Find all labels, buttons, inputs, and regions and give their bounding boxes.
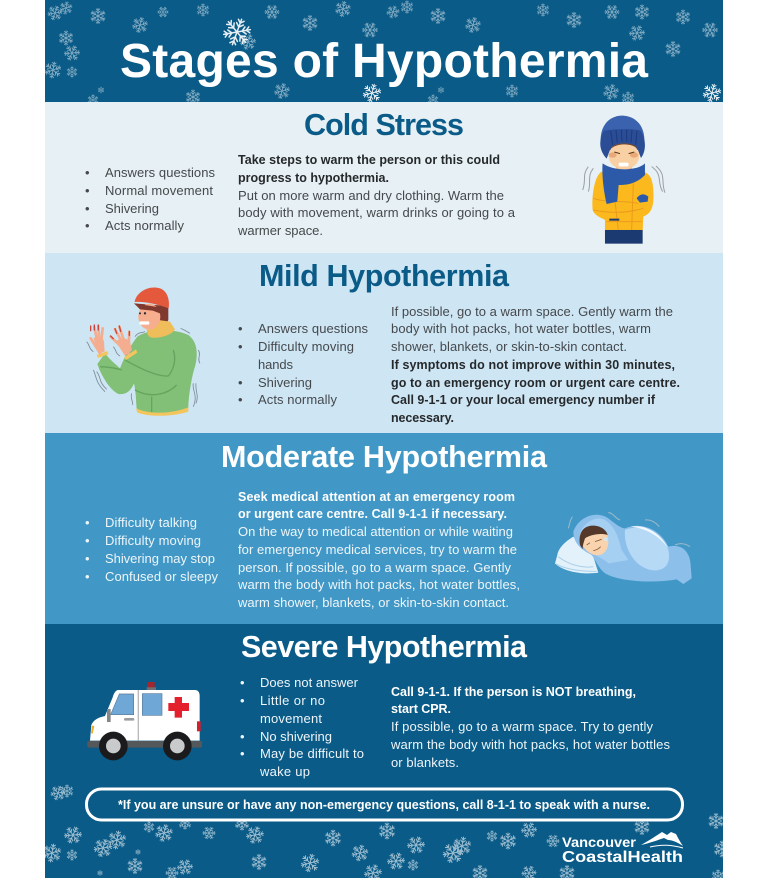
icon: shivering person in green sweater <box>87 288 200 416</box>
advice: severe: If possible, go to a warm space. Try to gently <box>391 719 654 734</box>
symptom list: cold stress: • <box>85 201 90 216</box>
symptom list: severe: May be difficult to <box>260 746 364 761</box>
symptom list: severe: • <box>240 693 245 708</box>
callout: non-emergency advice: *If you are unsure or have any non-emergency questions, call 8-1-1 to speak with a nurse. <box>118 798 650 812</box>
panel: severe hypothermia <box>42 624 730 878</box>
symptom list: cold stress: Acts normally <box>105 218 184 233</box>
symptom list: cold stress <box>85 165 216 233</box>
logo: Vancouver Coastal Health: Vancouver <box>562 834 637 850</box>
symptom list: moderate: • <box>85 515 90 530</box>
advice: moderate: warm shower, blankets, or skin-to-skin contact. <box>237 595 509 610</box>
advice: moderate: for emergency medical services, try to warm the <box>238 542 517 557</box>
panel: moderate hypothermia <box>45 433 723 624</box>
symptom list: moderate: • <box>85 533 90 548</box>
advice: cold stress <box>237 153 516 238</box>
advice: mild: necessary. <box>391 411 454 425</box>
symptom list: mild: • <box>238 339 243 354</box>
symptom list: severe: Little or no <box>260 693 325 708</box>
symptom list: cold stress: • <box>85 165 90 180</box>
advice: mild: If possible, go to a warm space. Gently warm the <box>391 304 673 319</box>
symptom list: cold stress: • <box>85 218 90 233</box>
advice: severe: start CPR. <box>391 702 451 716</box>
heading: moderate hypothermia: Moderate Hypothermia <box>221 440 548 474</box>
symptom list: severe <box>240 675 364 779</box>
advice: mild <box>391 304 680 425</box>
advice: moderate: Seek medical attention at an emergency room <box>238 490 515 504</box>
symptom list: moderate: Difficulty moving <box>105 533 201 548</box>
symptom list: mild: hands <box>258 357 294 372</box>
panel: cold stress <box>45 102 723 253</box>
advice: severe <box>390 685 670 770</box>
symptom list: mild: • <box>238 375 243 390</box>
advice: moderate: On the way to medical attention or while waiting <box>238 524 513 539</box>
symptom list: moderate: • <box>85 551 90 566</box>
advice: moderate <box>237 490 520 610</box>
callout: non-emergency advice <box>86 789 682 820</box>
symptom list: mild <box>238 321 368 407</box>
header snowflakes <box>44 0 720 105</box>
symptom list: mild: Acts normally <box>258 392 338 407</box>
advice: moderate: or urgent care centre. Call 9-1-1 if necessary. <box>238 507 507 521</box>
heading: mild hypothermia: Mild Hypothermia <box>259 259 510 293</box>
advice: mild: body with hot packs, hot water bottles, warm <box>391 321 651 336</box>
symptom list: severe: • <box>240 729 245 744</box>
advice: severe: warm the body with hot packs, hot water bottles <box>390 737 670 752</box>
symptom list: severe: wake up <box>259 764 310 779</box>
symptom list: severe: movement <box>260 711 322 726</box>
symptom list: cold stress: • <box>85 183 90 198</box>
advice: cold stress: warmer space. <box>237 223 323 238</box>
symptom list: severe: • <box>240 675 245 690</box>
advice: moderate: warm the body with hot packs, hot water bottles, <box>237 577 520 592</box>
symptom list: cold stress: Shivering <box>105 201 159 216</box>
advice: mild: Call 9-1-1 or your local emergency number if <box>391 393 656 407</box>
advice: cold stress: Put on more warm and dry clothing. Warm the <box>238 188 504 203</box>
title: Stages of Hypothermia <box>120 35 648 88</box>
advice: severe: or blankets. <box>391 755 459 770</box>
advice: moderate: person. If possible, go to a warm space. Gently <box>238 560 512 575</box>
symptom list: cold stress: Normal movement <box>105 183 213 198</box>
symptom list: mild: Difficulty moving <box>258 339 354 354</box>
symptom list: moderate: Confused or sleepy <box>105 569 218 584</box>
symptom list: mild: Answers questions <box>258 321 368 336</box>
symptom list: mild: Shivering <box>258 375 312 390</box>
symptom list: moderate <box>85 515 218 584</box>
symptom list: moderate: Shivering may stop <box>105 551 215 566</box>
symptom list: severe: No shivering <box>260 729 332 744</box>
symptom list: mild: • <box>238 321 243 336</box>
panel: mild hypothermia <box>45 253 723 433</box>
symptom list: severe: Does not answer <box>260 675 359 690</box>
bright header snowflakes <box>220 15 723 104</box>
bottom snowflakes <box>42 784 730 878</box>
symptom list: mild: • <box>238 392 243 407</box>
advice: cold stress: Take steps to warm the person or this could <box>238 153 500 167</box>
symptom list: cold stress: Answers questions <box>105 165 216 180</box>
icon: ambulance <box>87 682 202 760</box>
logo: Vancouver Coastal Health <box>562 832 683 866</box>
advice: mild: go to an emergency room or urgent care centre. <box>391 376 680 390</box>
advice: mild: If symptoms do not improve within 30 minutes, <box>391 358 675 372</box>
symptom list: moderate: • <box>85 569 90 584</box>
logo: Vancouver Coastal Health: CoastalHealth <box>562 849 683 866</box>
symptom list: severe: • <box>240 746 245 761</box>
advice: mild: shower, blankets, or skin-to-skin contact. <box>391 339 627 354</box>
advice: cold stress: progress to hypothermia. <box>238 171 389 185</box>
symptom list: moderate: Difficulty talking <box>105 515 197 530</box>
advice: severe: Call 9-1-1. If the person is NOT breathing, <box>391 685 636 699</box>
heading: cold stress: Cold Stress <box>304 108 464 142</box>
heading: severe hypothermia: Severe Hypothermia <box>241 630 528 664</box>
icon: shivering person in yellow jacket and blue hat <box>583 116 665 244</box>
panel: header <box>44 0 723 105</box>
advice: cold stress: body with movement, warm drinks or going to a <box>238 205 516 220</box>
icon: person under blanket <box>555 513 692 584</box>
